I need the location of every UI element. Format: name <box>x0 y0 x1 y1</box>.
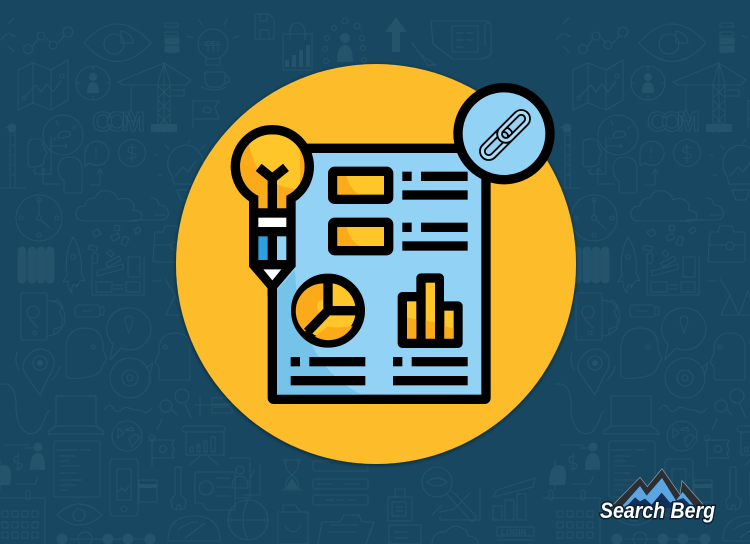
logo: Search Berg <box>600 469 715 523</box>
yellow circle <box>176 64 576 464</box>
document page <box>272 148 486 399</box>
text box 1 <box>333 171 468 200</box>
main illustration <box>231 88 550 399</box>
background doodle pattern: COM <box>92 106 145 137</box>
pie chart <box>296 278 360 343</box>
background doodle pattern: COM <box>647 106 700 137</box>
icon: lightbulb pencil <box>231 125 314 297</box>
background doodle pattern: IDEA <box>204 41 221 48</box>
bottom text lines <box>291 357 468 385</box>
logo mountains <box>611 469 707 509</box>
background doodle pattern: LOGIN <box>501 528 527 537</box>
text box 2 <box>333 222 468 251</box>
bar chart <box>402 278 458 343</box>
icon: chain link badge <box>458 88 550 180</box>
logo wordmark: Search Berg <box>600 498 715 523</box>
